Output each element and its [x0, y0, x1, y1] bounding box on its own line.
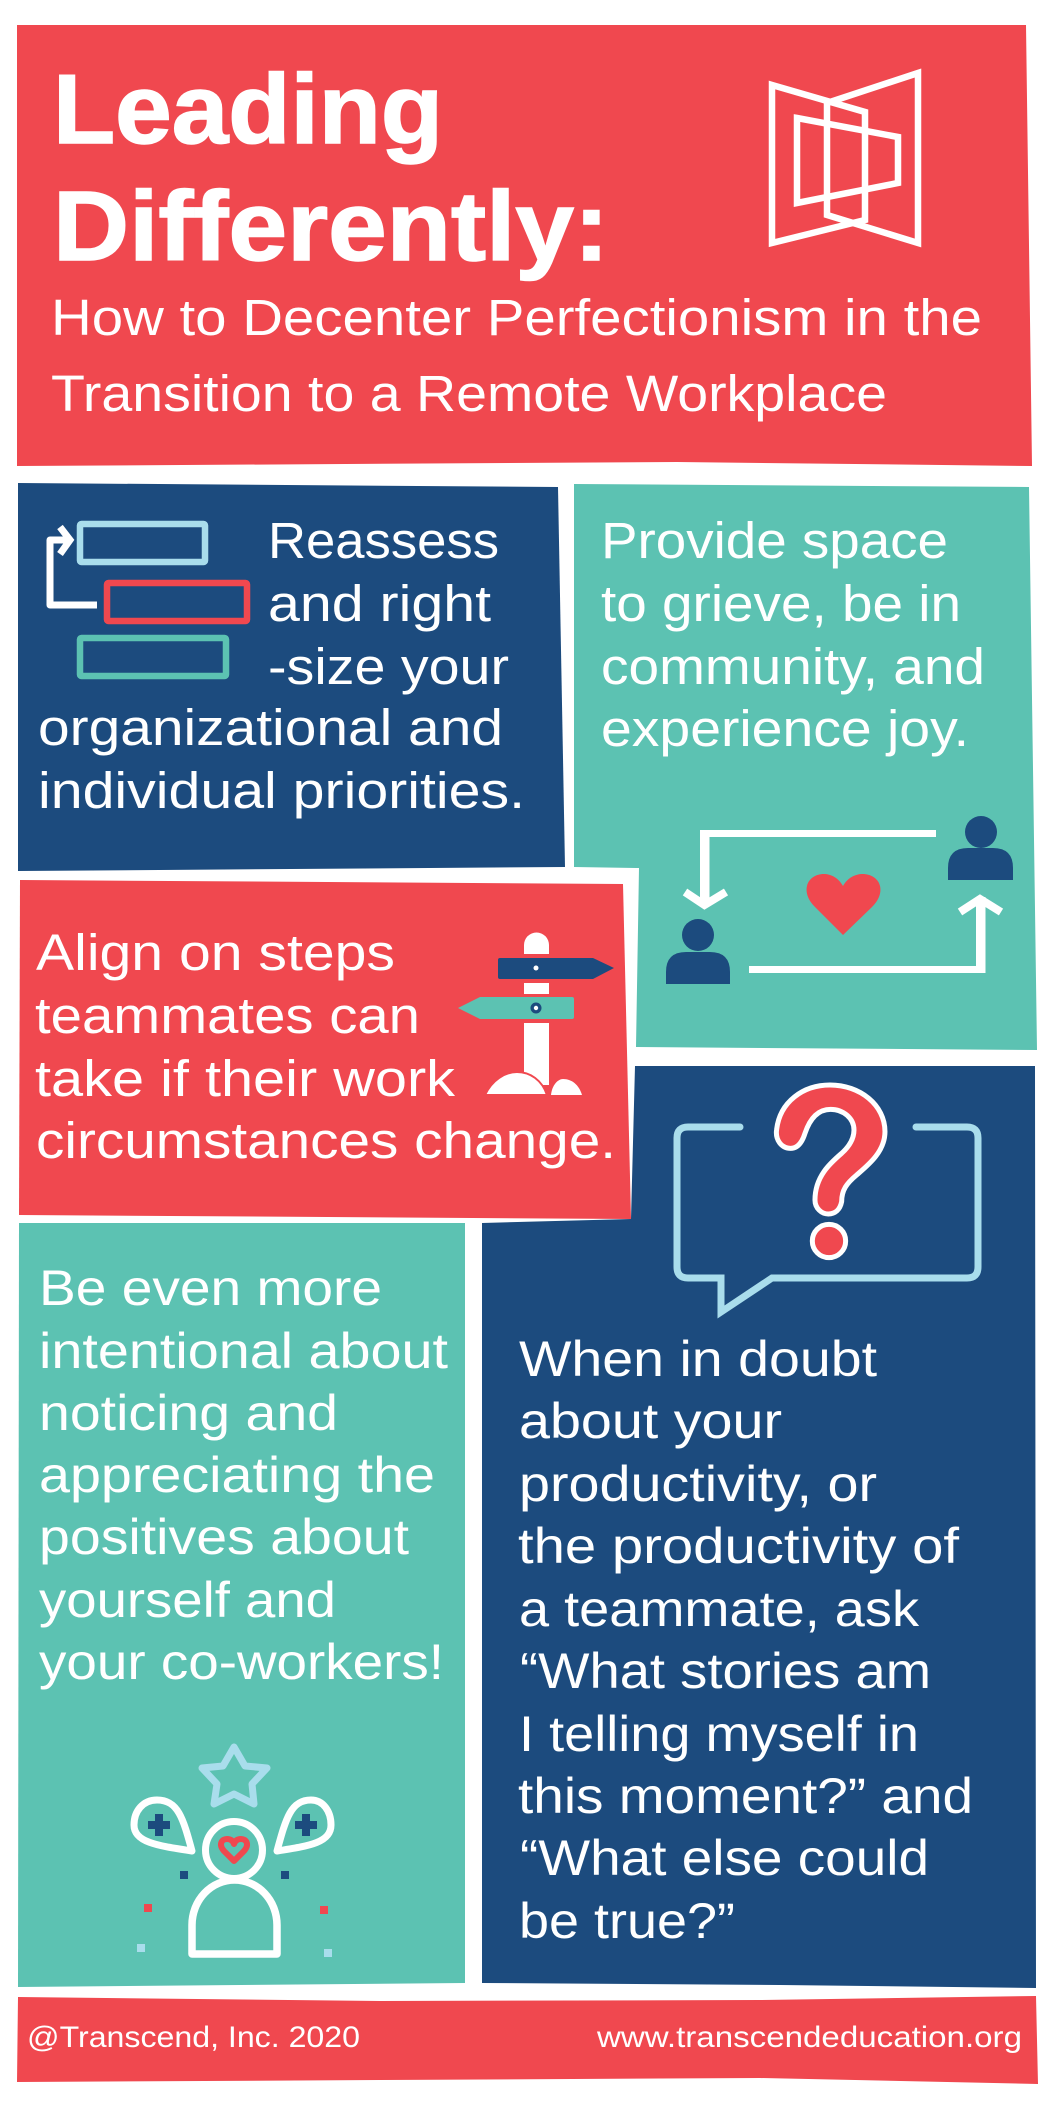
- icon: reordered priority boxes: [50, 524, 247, 676]
- panel text: I telling myself in: [519, 1706, 919, 1762]
- footer background: [17, 1996, 1038, 2084]
- panel text: community, and: [601, 638, 985, 695]
- panel: footer: [17, 1996, 1038, 2084]
- title: Leading: [53, 54, 443, 164]
- panel: space to grieve: [574, 484, 1037, 1050]
- panel background: [574, 484, 1037, 1050]
- panel text: “What stories am: [520, 1643, 931, 1699]
- panel: be intentional: [18, 1223, 465, 1987]
- panel text: appreciating the: [39, 1447, 435, 1503]
- panel text: circumstances change.: [36, 1112, 616, 1169]
- panel text: the productivity of: [518, 1518, 959, 1574]
- panel: header: [17, 25, 1032, 466]
- panel text: experience joy.: [601, 700, 969, 757]
- panel text: Reassess: [268, 512, 499, 569]
- panel text: intentional about: [39, 1323, 448, 1379]
- panel text: teammates can: [35, 987, 420, 1044]
- panel: align on steps: [19, 880, 631, 1219]
- panel background: [18, 483, 565, 871]
- panel text: to grieve, be in: [601, 575, 961, 632]
- panel text: a teammate, ask: [519, 1581, 920, 1637]
- panel background: [19, 880, 631, 1219]
- icon: open window: [772, 73, 918, 243]
- panel text: [35, 924, 616, 1169]
- panel text: [39, 1260, 448, 1690]
- panel text: [601, 512, 985, 757]
- panel text: [38, 512, 525, 819]
- title: Differently:: [53, 171, 609, 281]
- panel text: -size your: [268, 638, 509, 695]
- panel: when in doubt: [482, 1066, 1036, 1988]
- panel text: organizational and: [38, 699, 503, 756]
- header background: [17, 25, 1032, 466]
- panel text: [518, 1331, 973, 1949]
- panel background: [482, 1066, 1036, 1988]
- panel text: productivity, or: [519, 1456, 877, 1512]
- panel text: and right: [268, 575, 491, 632]
- icon: person with star and hearts: [134, 1747, 332, 1957]
- subtitle: How to Decenter Perfectionism in the: [51, 289, 982, 346]
- panel text: noticing and: [39, 1385, 338, 1441]
- icon: signpost: [458, 932, 614, 1095]
- panel text: yourself and: [39, 1572, 336, 1628]
- icon: speech bubble: [677, 1127, 978, 1312]
- copyright text: @Transcend, Inc. 2020: [27, 2021, 360, 2054]
- panel background: [18, 1223, 465, 1987]
- panel text: this moment?” and: [518, 1768, 973, 1824]
- icon: question mark: [776, 1085, 885, 1258]
- panel text: about your: [519, 1393, 782, 1449]
- panel text: take if their work: [35, 1050, 456, 1107]
- panel text: be true?”: [519, 1893, 735, 1949]
- title: [53, 54, 609, 281]
- panel text: Align on steps: [36, 924, 395, 981]
- panel text: individual priorities.: [38, 762, 525, 819]
- panel text: When in doubt: [519, 1331, 877, 1387]
- panel text: Be even more: [39, 1260, 382, 1316]
- website text: www.transcendeducation.org: [596, 2021, 1022, 2054]
- panel text: “What else could: [520, 1830, 929, 1886]
- subtitle: [51, 289, 982, 422]
- panel: reassess priorities: [18, 483, 565, 871]
- panel text: Provide space: [601, 512, 948, 569]
- panel text: positives about: [39, 1509, 409, 1565]
- subtitle: Transition to a Remote Workplace: [51, 365, 887, 422]
- icon: two people exchanging care: [666, 816, 1013, 984]
- panel text: your co-workers!: [39, 1634, 444, 1690]
